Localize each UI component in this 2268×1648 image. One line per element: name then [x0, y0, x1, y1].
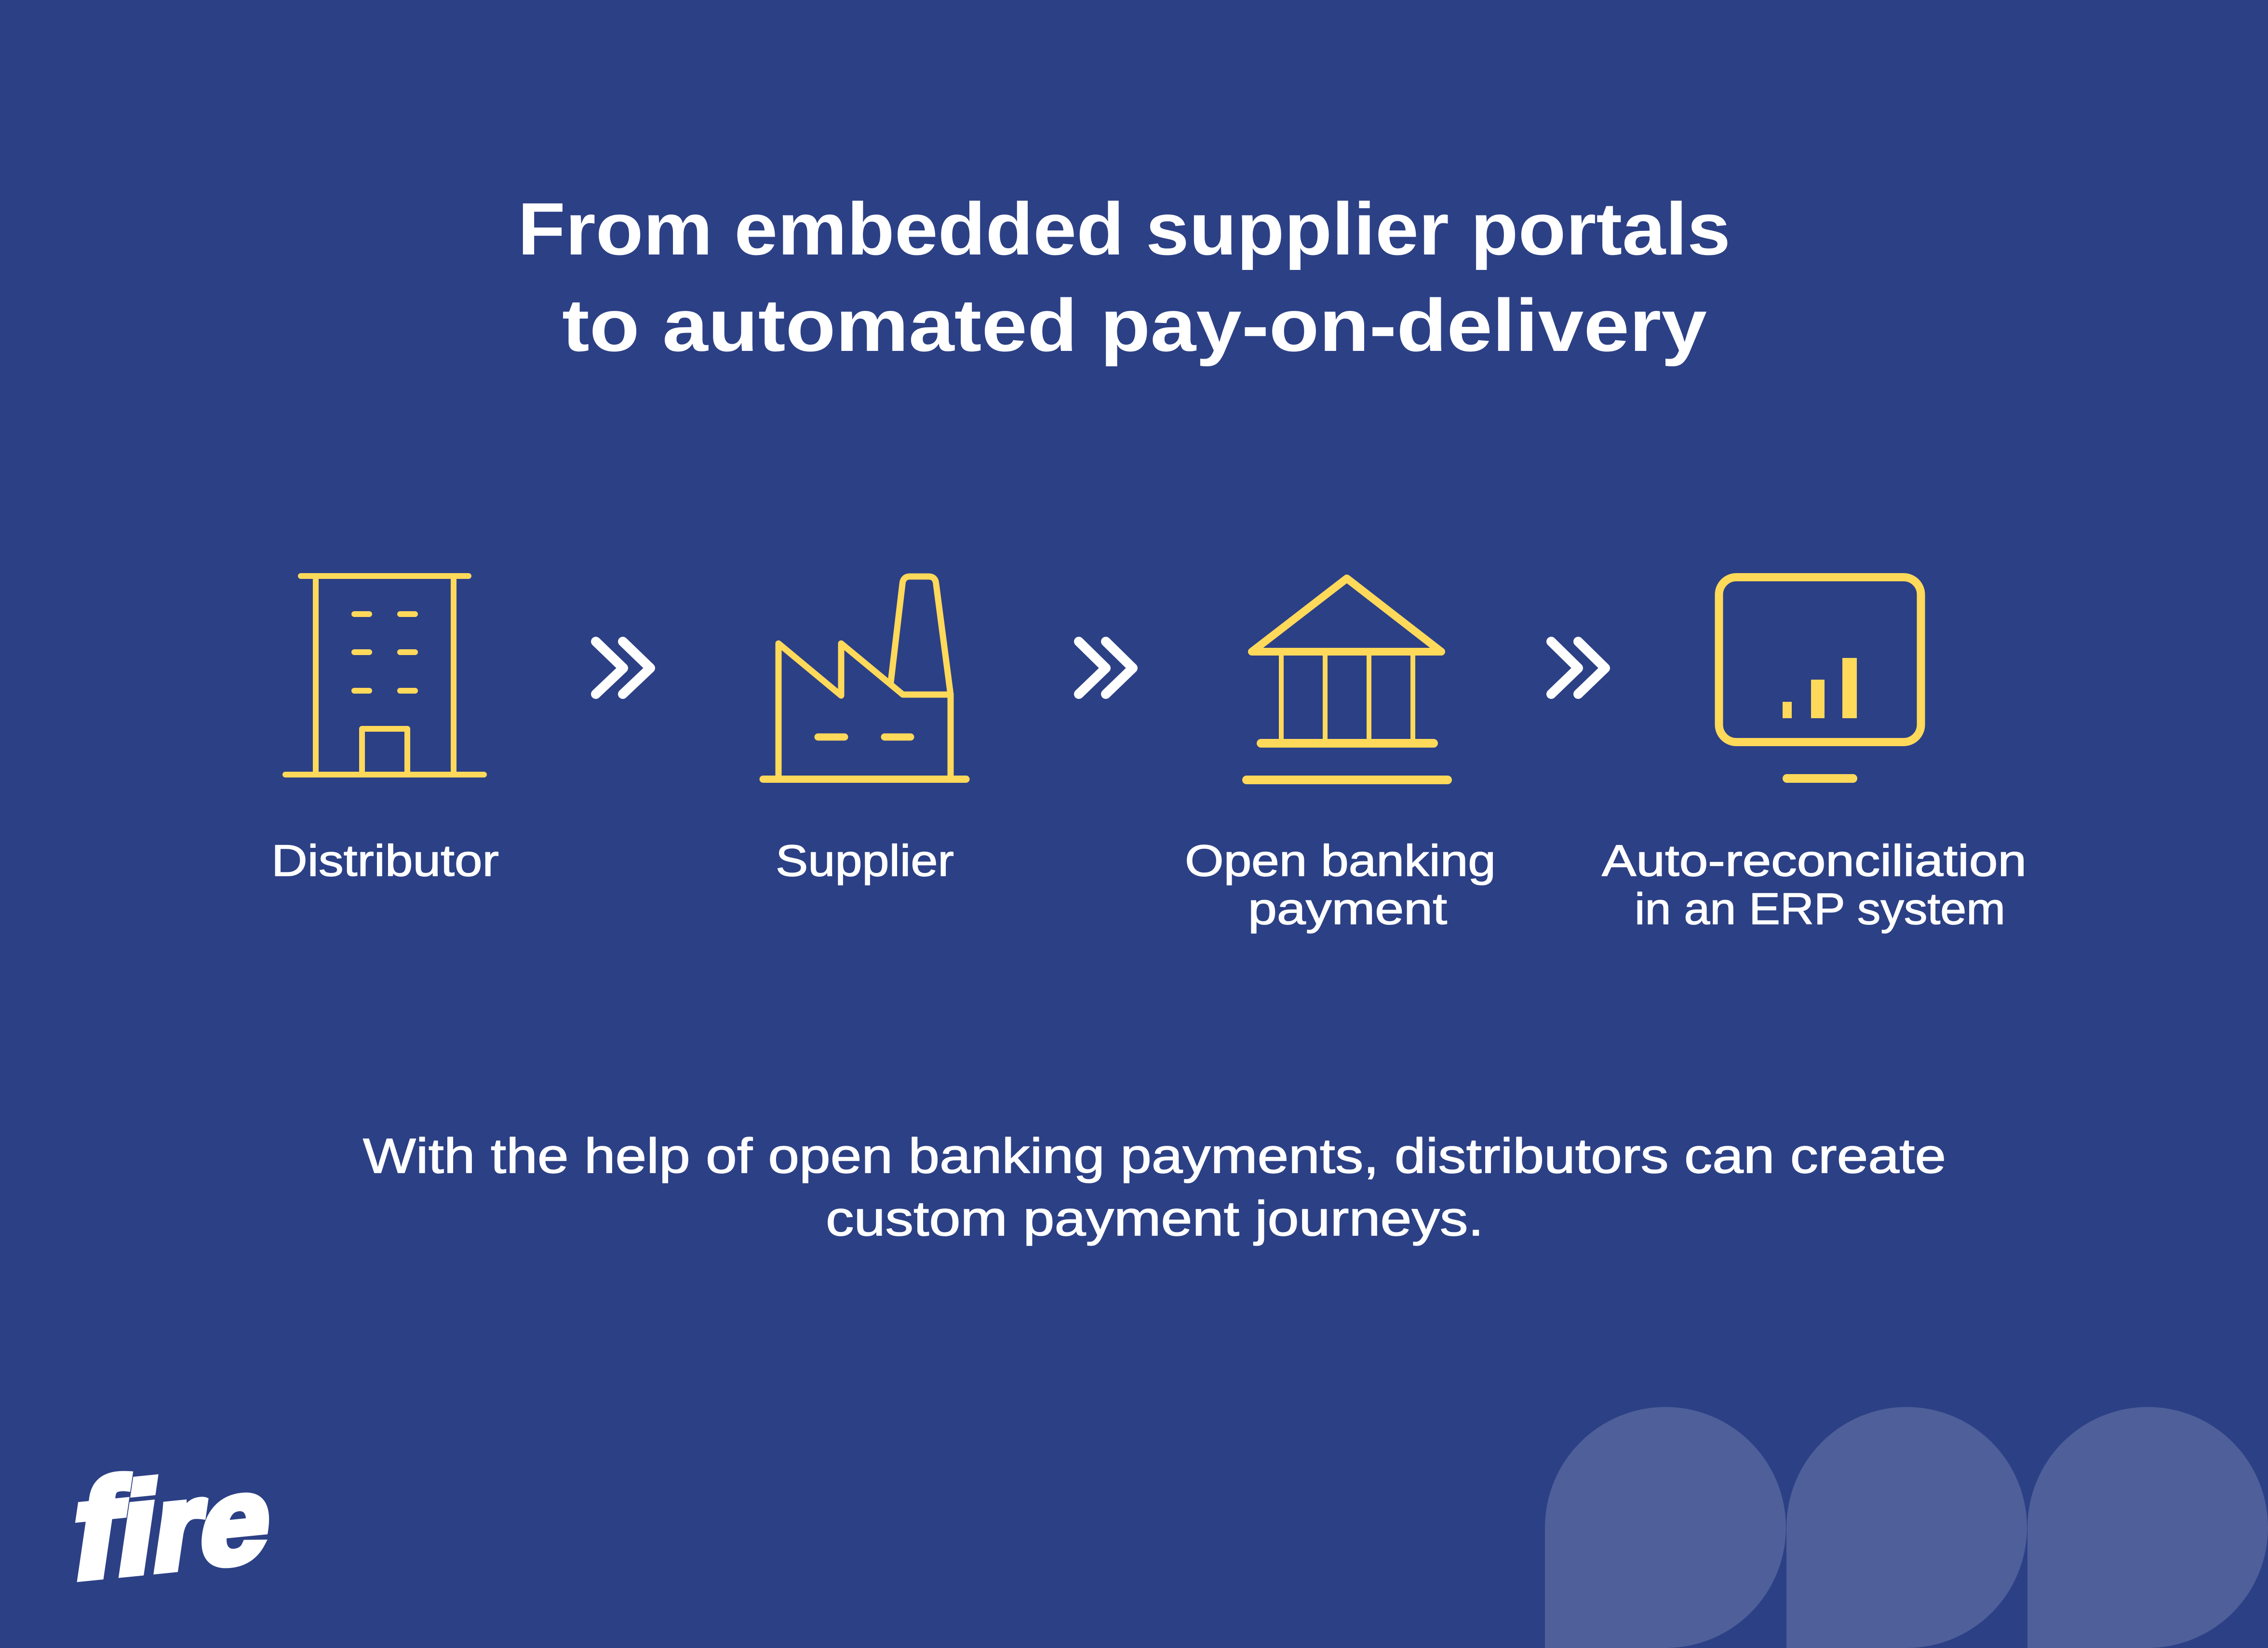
icon: open banking: [1247, 578, 1448, 780]
title: to automated pay-on-delivery: [562, 284, 1707, 367]
arrow: open banking to reconciliation: [1551, 642, 1605, 694]
icon: distributor building: [285, 576, 484, 775]
label: distributor: Distributor: [271, 836, 499, 885]
icon: supplier factory: [763, 576, 966, 779]
label: auto-reconciliation in an ERP system: in an ERP system: [1635, 884, 2005, 934]
icon: ERP monitor: [1719, 577, 1921, 778]
body text: [363, 1128, 1946, 1246]
label: open banking payment: Open banking: [1185, 836, 1496, 885]
arrow: distributor to supplier: [596, 642, 650, 694]
body text: With the help of open banking payments, distributors can create: [363, 1128, 1946, 1183]
logo: fire: fire: [64, 1434, 282, 1608]
title: [518, 188, 1731, 367]
label: supplier: Supplier: [776, 836, 954, 885]
body text: custom payment journeys.: [826, 1191, 1484, 1246]
label: auto-reconciliation in an ERP system: [1602, 836, 2026, 934]
arrow: supplier to open banking: [1079, 642, 1133, 694]
label: open banking payment: payment: [1248, 884, 1447, 934]
title: From embedded supplier portals: [518, 188, 1731, 270]
decorative shapes: rounded leaves: [1545, 1407, 2268, 1648]
label: auto-reconciliation in an ERP system: Auto-reconciliation: [1602, 836, 2026, 885]
label: open banking payment: [1185, 836, 1496, 934]
